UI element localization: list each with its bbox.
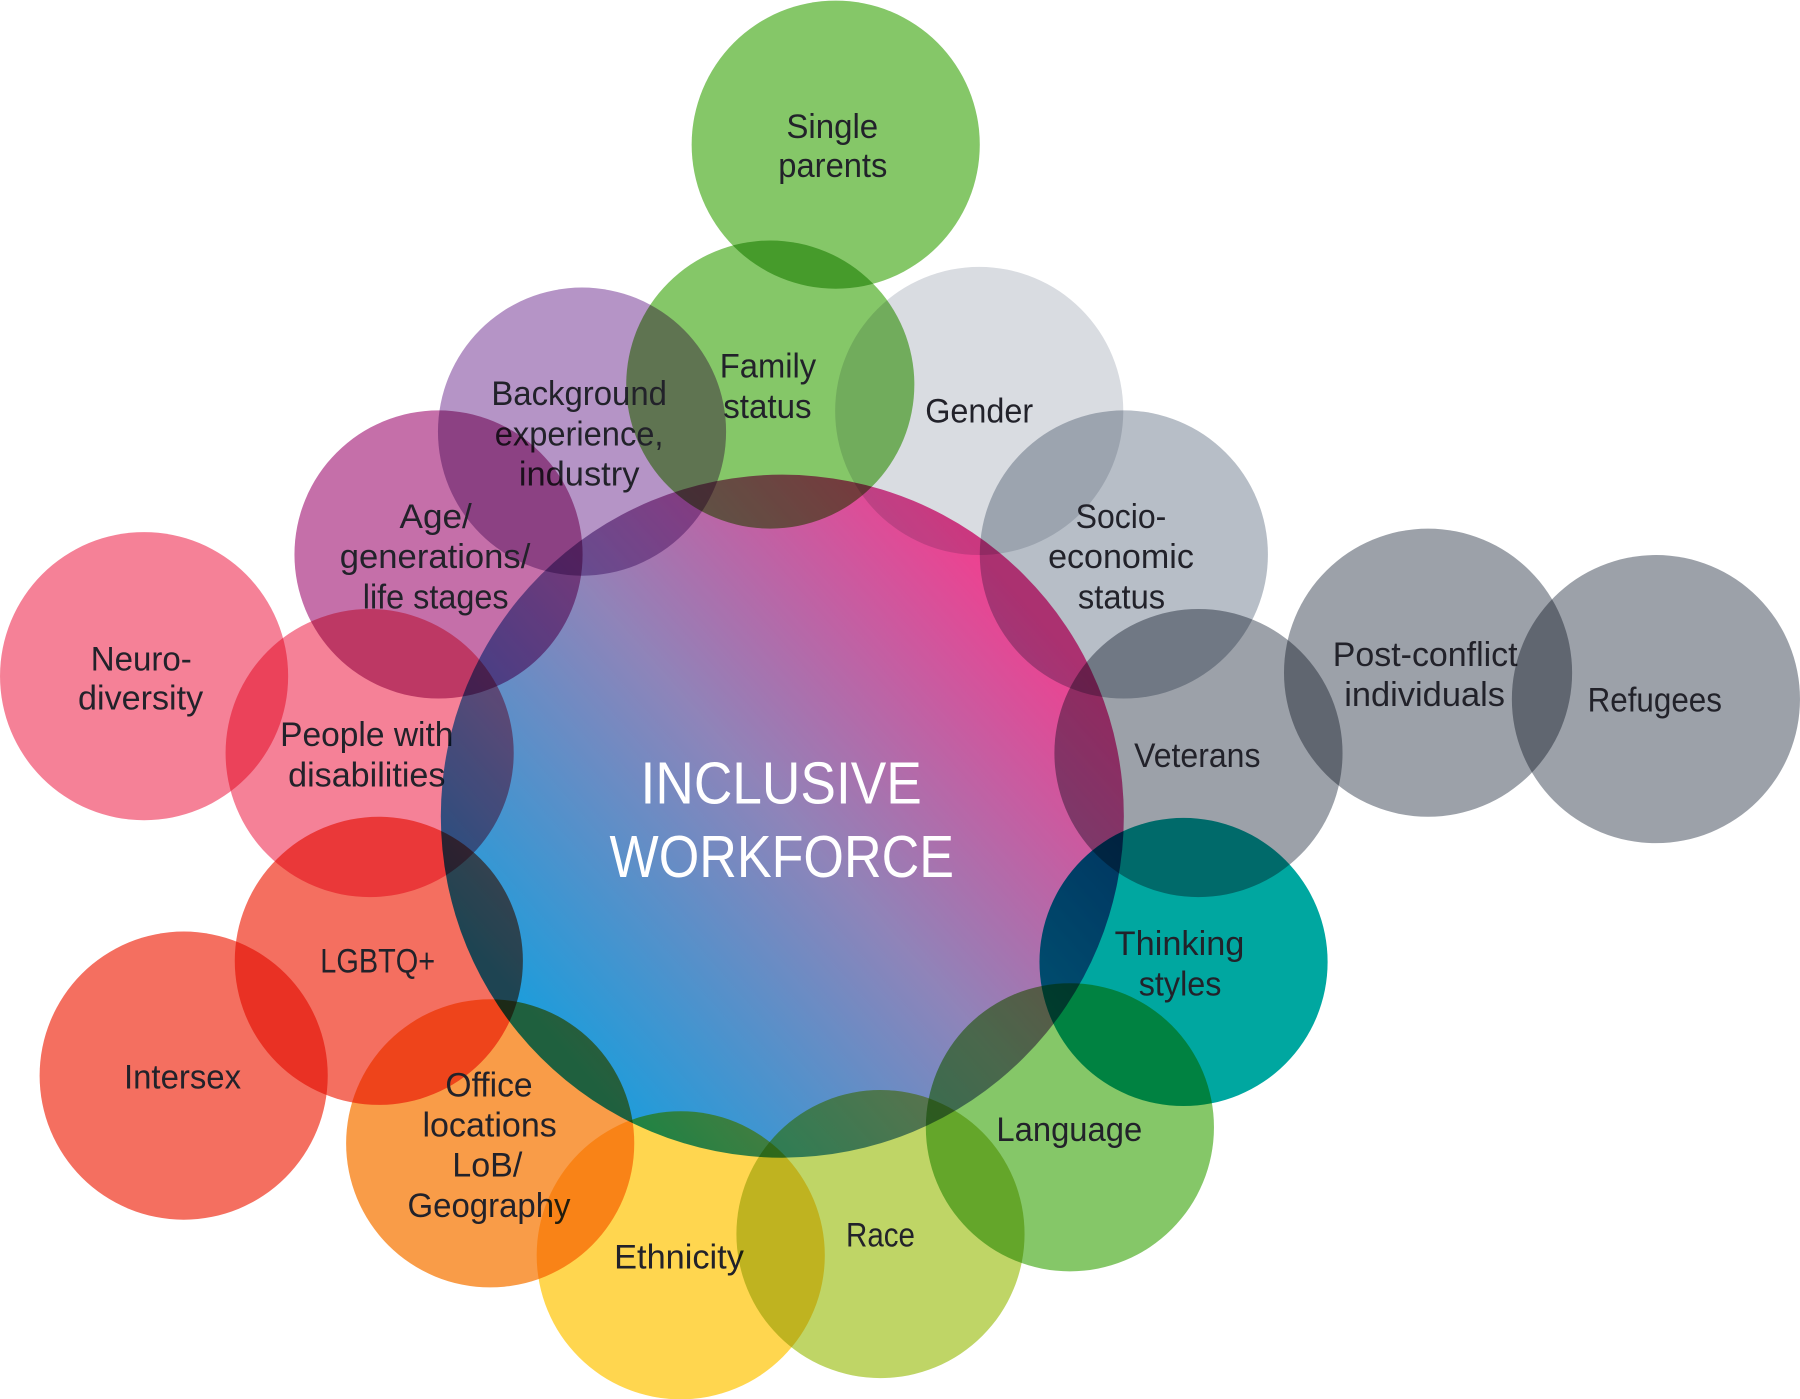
circle: Background experience, industry	[438, 288, 726, 576]
circle: Socio-economic status	[980, 410, 1268, 699]
circle: Race: Race	[846, 1217, 915, 1255]
circle: Ethnicity	[537, 1111, 825, 1399]
circle: Thinking styles: Thinking	[1115, 925, 1244, 963]
circle: Post-conflict individuals	[1284, 529, 1572, 817]
circle: Veterans	[1054, 609, 1343, 897]
circle: Intersex	[40, 932, 328, 1220]
circle: Age, generations, life stages: Age/	[399, 498, 472, 536]
circle: People with disabilities: disabilities	[288, 756, 445, 794]
circle: Family status	[626, 240, 914, 529]
circle: People with disabilities: People with	[280, 716, 453, 754]
circle: Socio-economic status: economic	[1048, 538, 1194, 576]
circle: Background experience, industry: Background	[491, 375, 667, 413]
circle: Single parents: Single	[786, 108, 878, 146]
circle: Socio-economic status: Socio-	[1076, 498, 1166, 536]
circle: Office locations, LoB, Geography: Geography	[408, 1187, 571, 1225]
circle: Single parents: parents	[778, 147, 887, 185]
circle: Office locations, LoB, Geography: locations	[422, 1106, 557, 1144]
circle: Family status: Family	[720, 348, 816, 386]
circle: Thinking styles: styles	[1139, 965, 1221, 1003]
central circle: Inclusive Workforce	[441, 475, 1124, 1158]
circle: Intersex: Intersex	[124, 1058, 241, 1096]
circle: People with disabilities	[226, 609, 514, 897]
circle: Age, generations, life stages: generations/	[340, 538, 531, 576]
circle: Age, generations, life stages: life stages	[363, 578, 509, 616]
circle: Veterans: Veterans	[1134, 737, 1260, 775]
circle: Refugees	[1512, 555, 1800, 843]
circle: Post-conflict individuals: individuals	[1344, 676, 1505, 714]
circle: Socio-economic status: status	[1078, 578, 1165, 616]
circle: Language: Language	[996, 1111, 1142, 1149]
circle: Office locations, LoB, Geography: Office	[445, 1066, 533, 1104]
central circle: Inclusive Workforce: WORKFORCE	[610, 823, 954, 890]
circle: Background experience, industry: industry	[519, 456, 639, 494]
circle: Refugees: Refugees	[1588, 682, 1722, 720]
circle: Single parents	[692, 1, 980, 289]
central circle: Inclusive Workforce: INCLUSIVE	[641, 750, 922, 817]
circle: Neuro-diversity	[0, 532, 288, 820]
circle: Gender	[835, 267, 1123, 555]
circle: Neuro-diversity: Neuro-	[91, 640, 192, 678]
circle: Language	[926, 983, 1214, 1271]
circle: Ethnicity: Ethnicity	[614, 1238, 744, 1276]
circle: Family status: status	[723, 388, 812, 426]
circle: Office locations, LoB, Geography	[346, 999, 634, 1287]
circle: Thinking styles	[1039, 818, 1328, 1106]
circle: Gender: Gender	[925, 392, 1033, 430]
circle: Office locations, LoB, Geography: LoB/	[452, 1147, 523, 1185]
circle: Age, generations, life stages	[294, 410, 583, 699]
circle: Race	[736, 1090, 1025, 1378]
circle: Background experience, industry: experience,	[495, 415, 664, 453]
circle: LGBTQ+	[235, 817, 523, 1105]
circle: Post-conflict individuals: Post-conflict	[1333, 636, 1518, 674]
circle: LGBTQ+: LGBTQ+	[320, 942, 435, 980]
circle: Neuro-diversity: diversity	[78, 679, 203, 717]
